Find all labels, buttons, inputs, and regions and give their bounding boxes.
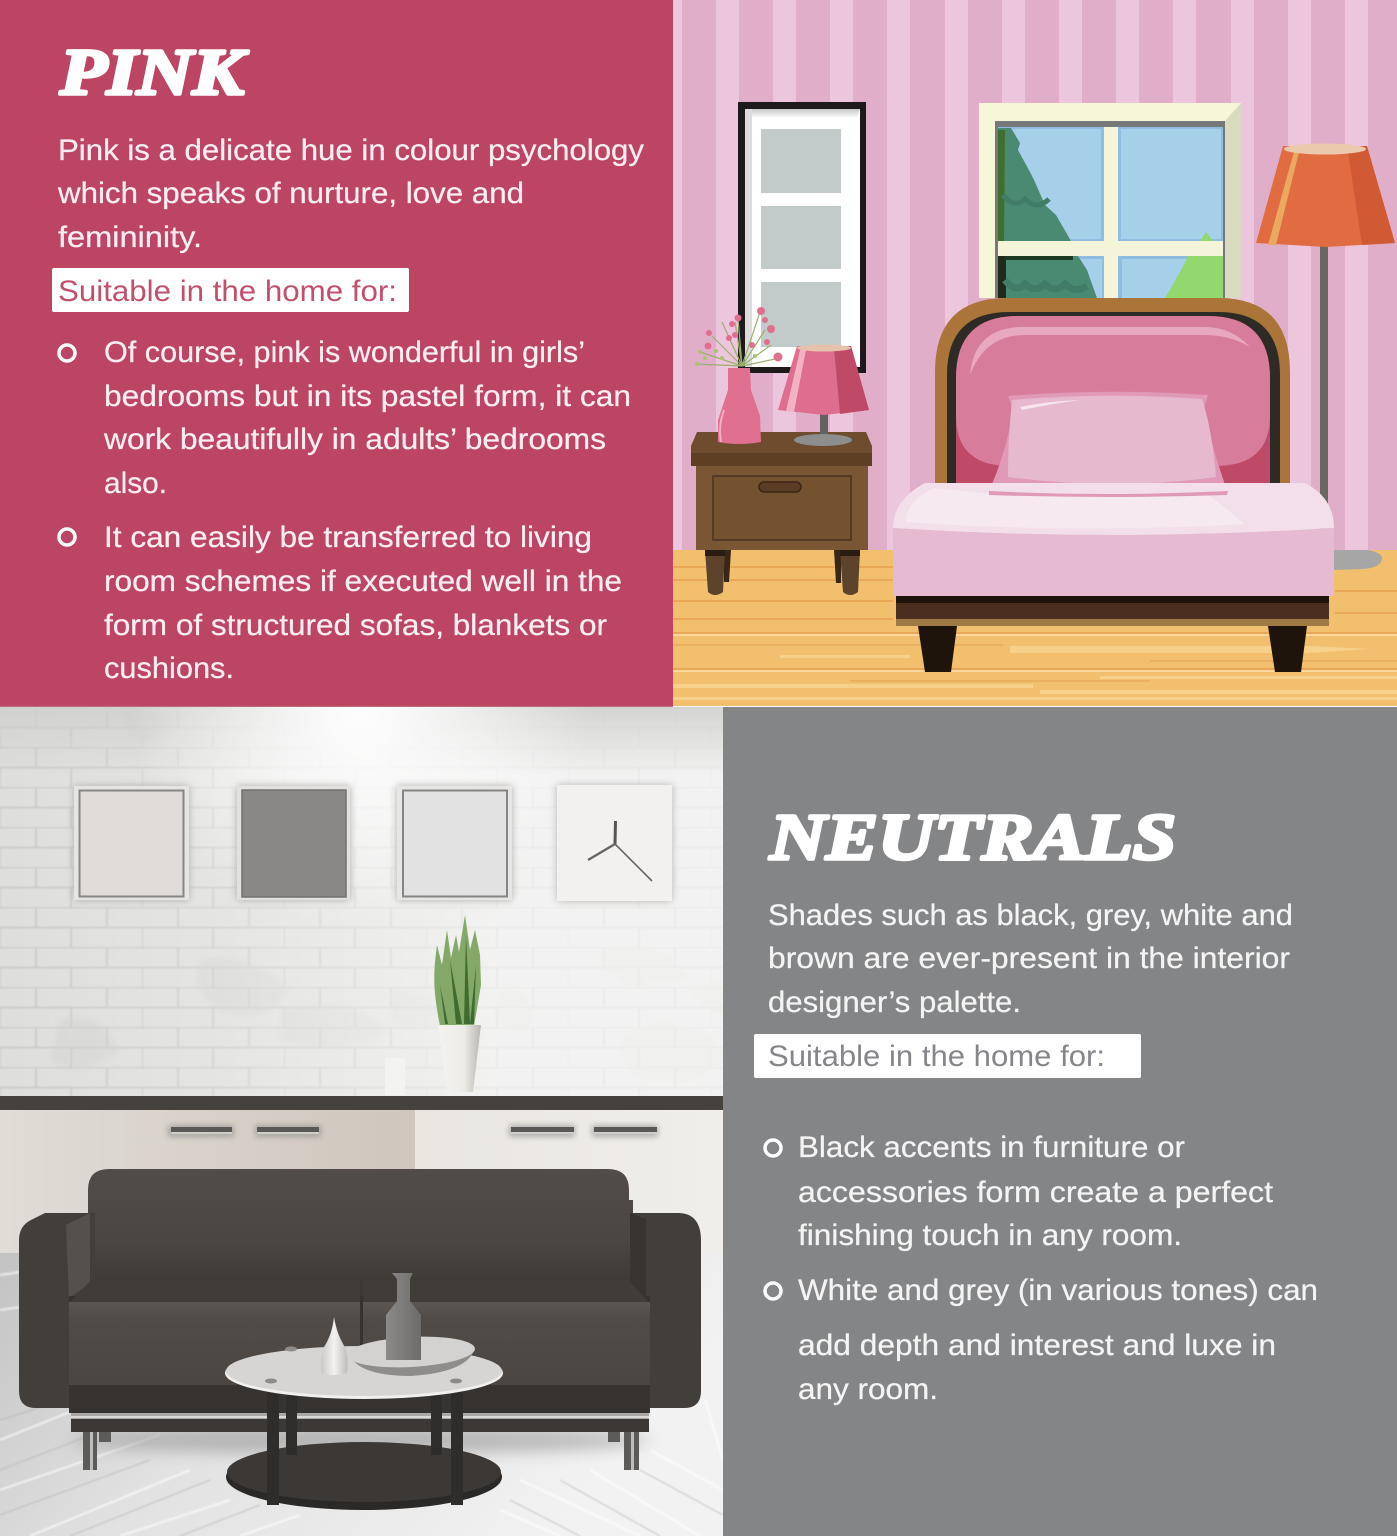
icon: potted plant: [434, 915, 481, 1092]
floor: [673, 550, 1397, 706]
bullet list: neutrals uses: accessories form create a perfect: [798, 1176, 1274, 1209]
bowl: [348, 1347, 475, 1376]
bullet list: neutrals uses: finishing touch in any room.: [798, 1219, 1182, 1252]
icon: bedside table: [691, 432, 872, 595]
bullet list: neutrals uses: Black accents in furniture or: [798, 1131, 1185, 1164]
icon: sofa: [19, 1169, 701, 1470]
text block: neutrals description: [768, 899, 1293, 1019]
bullet list: pink uses: Of course, pink is wonderful in girls’: [104, 336, 585, 369]
headboard: [935, 298, 1290, 490]
label: suitable in the home for: Suitable in the home for:: [58, 275, 397, 308]
bullet list: neutrals uses: add depth and interest and luxe in: [798, 1329, 1276, 1362]
bullet list: neutrals uses: any room.: [798, 1373, 938, 1406]
illustration: pink bedroom: [673, 0, 1397, 706]
bullet list: pink uses: [59, 336, 631, 685]
icon: floor lamp: [1256, 144, 1395, 570]
icon: wall clock: [557, 785, 672, 901]
back: [88, 1169, 633, 1300]
icon: bed: [893, 298, 1334, 672]
text block: pink description: femininity.: [58, 221, 202, 254]
text block: pink description: which speaks of nurture, love and: [57, 177, 524, 210]
heading: PINK: PINK: [59, 36, 249, 109]
bullet list: pink uses: cushions.: [104, 652, 234, 685]
bullet list: pink uses: room schemes if executed well in the: [104, 565, 622, 598]
small vase: [321, 1317, 348, 1375]
icon: window with trees: [979, 103, 1241, 298]
icon: coffee table: [225, 1273, 503, 1510]
icon: picture frames: [74, 786, 512, 900]
wall stripes: [673, 0, 1397, 552]
bullet list: pink uses: bedrooms but in its pastel form, it can: [104, 380, 631, 413]
icon: sideboard: [0, 1096, 723, 1253]
bullet list: pink uses: also.: [104, 467, 167, 500]
icon: vase with flowers: [695, 307, 782, 444]
textured wall: [0, 707, 723, 1147]
bottle: [386, 1273, 421, 1360]
legs: [83, 1425, 639, 1470]
base: [896, 596, 1329, 603]
mattress: [893, 483, 1334, 535]
pillow: [989, 392, 1228, 496]
bullet list: neutrals uses: White and grey (in various tones) can: [798, 1274, 1318, 1307]
illustration: neutral living room: [0, 707, 723, 1536]
bullet list: pink uses: form of structured sofas, blankets or: [104, 609, 607, 642]
bullet list: pink uses: work beautifully in adults’ bedrooms: [103, 423, 606, 456]
text block: pink description: Pink is a delicate hue in colour psychology: [58, 134, 644, 167]
rails: [71, 1413, 649, 1419]
text block: neutrals description: Shades such as black, grey, white and: [768, 899, 1293, 932]
arms: [19, 1213, 95, 1408]
bullet list: pink uses: It can easily be transferred to living: [104, 521, 592, 554]
label: suitable in the home for: [754, 1034, 1141, 1078]
floor: [0, 1250, 723, 1536]
text block: pink description: [57, 134, 644, 254]
label: suitable in the home for: Suitable in the home for:: [768, 1040, 1105, 1073]
panel: pink text: [0, 0, 673, 707]
icon: wall mirror: [738, 102, 866, 373]
label: suitable in the home for: [52, 268, 409, 312]
bullet list: neutrals uses: [765, 1131, 1318, 1406]
panel: neutrals text: [723, 707, 1397, 1536]
heading: NEUTRALS: NEUTRALS: [769, 801, 1176, 874]
seat: [69, 1385, 650, 1413]
text block: neutrals description: designer’s palette.: [768, 986, 1021, 1019]
icon: table lamp: [778, 344, 869, 446]
text block: neutrals description: brown are ever-present in the interior: [768, 942, 1290, 975]
